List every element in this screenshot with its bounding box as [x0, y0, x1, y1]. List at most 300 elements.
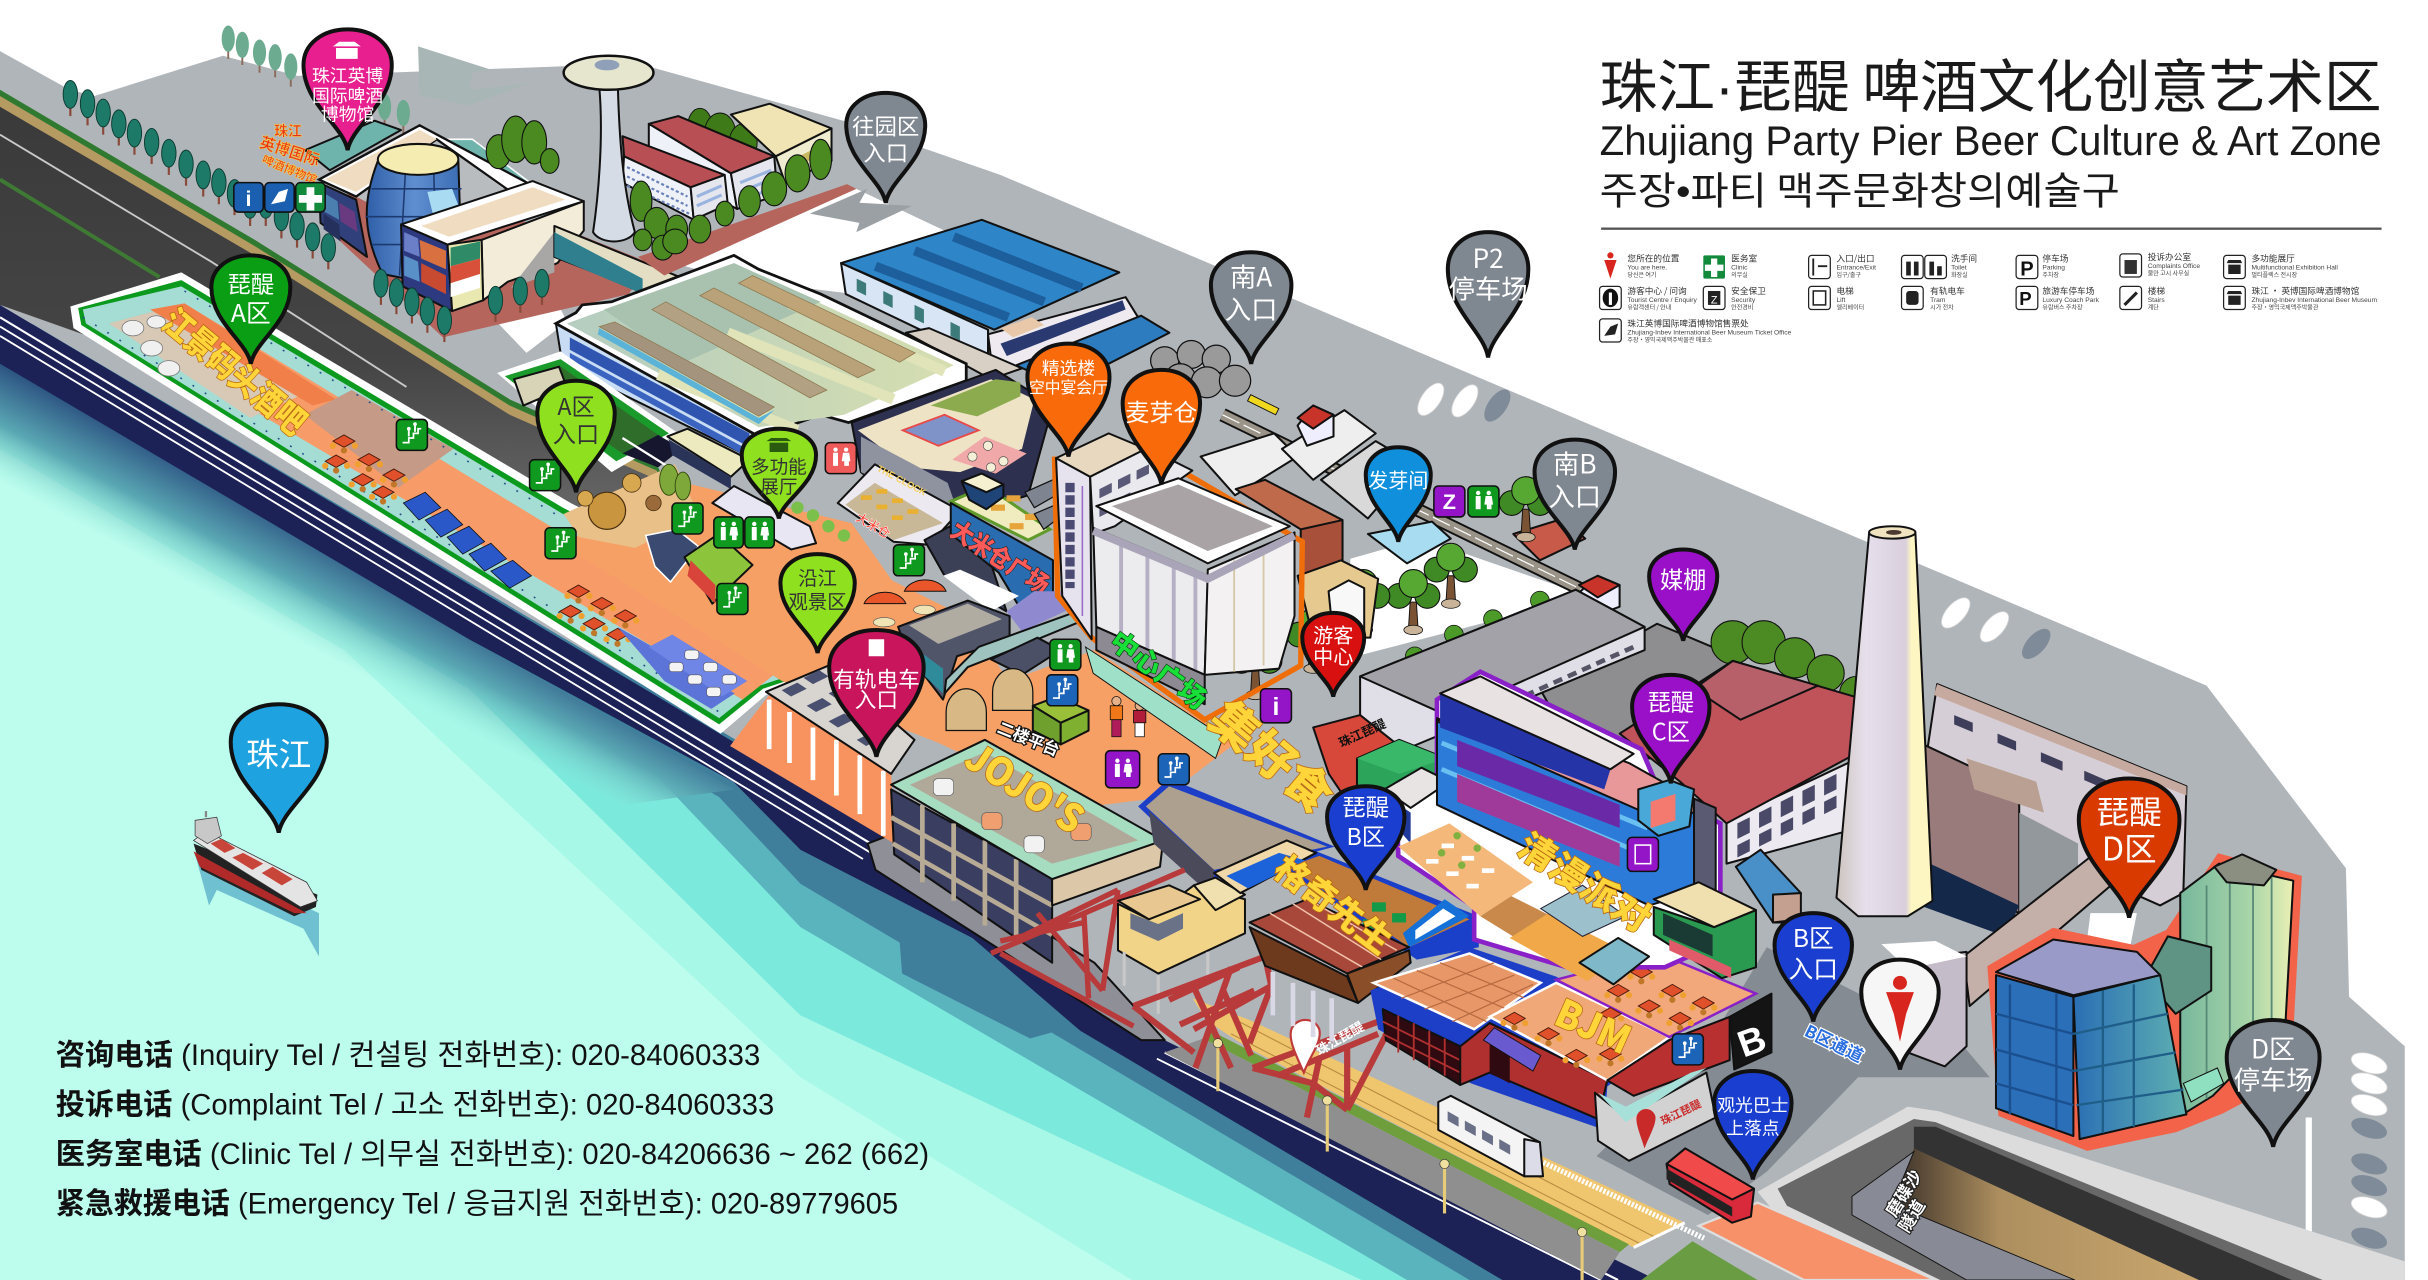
legend: tourist centre [1600, 285, 1698, 312]
museum sign [257, 123, 323, 187]
legend: parking: Parking [2042, 264, 2065, 271]
panel: grey warehouses [1360, 590, 1767, 758]
pin: malt silo: 麦芽仓 [1125, 393, 1197, 428]
salmon walkway [1699, 1203, 1936, 1280]
panel: telephone numbers [56, 1039, 929, 1220]
second floor label: 二楼平台 [994, 714, 1064, 761]
blue canopy [951, 503, 1053, 611]
pin: B zone [1327, 786, 1404, 890]
panel: blue warehouse [841, 220, 1169, 387]
glass rail [1085, 647, 1223, 758]
panel: legend [1600, 251, 2377, 344]
bus white [1438, 1096, 1543, 1176]
pin: tram entrance [829, 630, 924, 757]
terrace [1398, 823, 1533, 916]
museum front trees [374, 269, 549, 342]
legend: tram: Tram [1930, 297, 1946, 304]
gas tanks [1151, 341, 1251, 398]
complaint tel: 投诉电话 (Complaint Tel / 고소 전화번호): 020-84060333 [56, 1088, 774, 1121]
blue right face [2073, 975, 2186, 1139]
pin: multifunction hall: 多功能 [751, 453, 807, 480]
legend: beer museum: 주장·영믹국제맥주박물관 [2251, 303, 2319, 312]
tunnel label: 磨碟沙 [1878, 1164, 1927, 1221]
patio [952, 436, 1027, 474]
panel: white service roads [492, 189, 1587, 658]
silo scalloped shadow [1093, 531, 1295, 579]
legend: tram [1902, 285, 1965, 312]
pin: multifunction hall [742, 429, 816, 518]
pin: visitor center: 游客 [1313, 619, 1353, 648]
panel: beer hall block [838, 370, 1146, 761]
orange walk [1510, 913, 1626, 981]
conveyor [1963, 854, 2118, 1006]
white tent [712, 486, 816, 549]
small dark kiosk [898, 601, 1010, 700]
legend: ticket office: 珠江英博国际啤酒博物馆售票处 [1627, 318, 1749, 330]
striped roof [1250, 899, 1409, 974]
plant side volume [2019, 813, 2078, 913]
white seats [669, 650, 736, 696]
panel: Modiesha tunnel [1641, 1107, 2405, 1280]
party pier logo on crane [1291, 1016, 1367, 1073]
lamps [1218, 1045, 1582, 1280]
legend: tourist centre: 유람객센터 / 안내 [1627, 303, 1671, 312]
hall roof [556, 255, 966, 436]
pin: sky banquet hall [1027, 344, 1109, 456]
ship cabin [195, 817, 221, 844]
legend: coach park [2016, 285, 2100, 312]
red-roof small kiosk [1579, 576, 1620, 616]
party pier wall: 珠江琵醍 [1658, 1095, 1704, 1129]
pin: sightseeing bus stop [1714, 1071, 1792, 1179]
pin: P2 parking: P2 [1472, 237, 1504, 276]
panel: Mr. Geqi restaurant [1214, 840, 1479, 1042]
pin: South A entrance: 入口 [1225, 288, 1277, 327]
pin: Zhujiang Inbev museum: 珠江英博 [312, 62, 383, 88]
orange umbrellas [864, 580, 946, 627]
legend: security [1703, 285, 1766, 312]
legend: you are here: You are here. [1627, 264, 1667, 271]
black B block: B [1732, 1017, 1771, 1065]
museum corridor [554, 226, 680, 294]
hedge [791, 501, 850, 542]
icon: info purple [1260, 689, 1291, 723]
navy cube [962, 474, 1003, 509]
legend: clinic: 의무실 [1731, 270, 1748, 279]
panel: dock and orange pier [730, 666, 1165, 1040]
green lawn [931, 379, 1020, 416]
museum sign: 英博国际 [257, 133, 323, 170]
bridge seating [1007, 591, 1075, 631]
legend: stairs: 계단 [2148, 303, 2159, 312]
ship hatches [211, 839, 293, 885]
panel: ship [194, 811, 319, 957]
legend: you are here: 당신은 여기 [1627, 270, 1656, 279]
panel: garden and stairs [564, 429, 850, 604]
glass canopy [1541, 885, 1626, 936]
pin: sky banquet hall: 空中宴会厅 [1029, 375, 1108, 398]
tiled roof [1373, 953, 1541, 1029]
panel: visitor center logo wall: 珠江琵醍 [1335, 714, 1389, 751]
arrow: park road [810, 189, 912, 232]
legend: you are here [1604, 252, 1680, 279]
silo roof [1096, 478, 1290, 563]
right deck [1556, 953, 1756, 1037]
pin: park entrance [846, 93, 925, 203]
panel: blue glass tower D-zone [1990, 854, 2299, 1148]
rock garden [564, 464, 700, 548]
icon: stairs green [396, 419, 924, 614]
legend: ticket office [1600, 318, 1792, 344]
pin: D zone parking: 停车场 [2234, 1059, 2313, 1098]
hedge row [1405, 591, 1549, 666]
icon: visitor info, ticket, clinic: i [246, 186, 252, 211]
party pier logo on crane: 珠江琵醍 [1312, 1016, 1367, 1059]
panel: BJM bar [1370, 947, 1771, 1161]
legend: toilet: Toilet [1951, 264, 1967, 271]
factory roof [1620, 661, 1864, 823]
green shrubs [1711, 621, 1874, 710]
pin: malt silo [1123, 370, 1200, 484]
legend: coach park: Luxury Coach Park [2042, 297, 2100, 304]
panel: central orange plaza [562, 480, 1236, 808]
legend: coach park: P [2019, 288, 2032, 309]
office tower [1056, 433, 1192, 639]
panel: river road [0, 90, 735, 534]
pin: C zone: 琵醍 [1648, 683, 1694, 717]
legend: security: Security [1731, 297, 1756, 304]
museum left wing [319, 125, 533, 257]
legend: parking: 주차장 [2042, 270, 2060, 279]
pin: sightseeing bus stop: 上落点 [1726, 1115, 1780, 1141]
pin: Pearl River: 珠江 [246, 729, 311, 776]
stairs [646, 529, 698, 582]
legend: lift: 엘리베이터 [1836, 303, 1864, 312]
pin: tram entrance: 有轨电车 [833, 663, 920, 694]
orange outline [1055, 457, 1302, 720]
crane three [1253, 1020, 1387, 1117]
office cream block [731, 104, 832, 183]
panel: red brick factory and shrubs [1620, 621, 1874, 864]
pin: sightseeing bus stop: 观光巴士 [1717, 1091, 1788, 1117]
green deck [951, 486, 1050, 540]
pin: D zone: D区 [2102, 824, 2157, 871]
white sofas [122, 316, 180, 376]
pin: A zone: A区 [231, 294, 271, 330]
plant body [1920, 743, 2019, 913]
tunnel road [1758, 1107, 2405, 1280]
red sign: rice barn plaza: 大米仓广场 [944, 511, 1057, 602]
legend: entrance: Entrance/Exit [1836, 264, 1876, 271]
terrace outline [70, 272, 875, 734]
icon: visitor info, ticket, clinic [234, 183, 325, 212]
deck [1490, 983, 1669, 1080]
legend: beer museum [2224, 285, 2377, 312]
legend: security: Z [1711, 294, 1718, 306]
legend: lift: 电梯 [1836, 285, 1854, 297]
red bus [1667, 1148, 1754, 1223]
legend: parking [2016, 253, 2069, 281]
panel: covered walkway [906, 328, 1022, 379]
pin: riverside viewpoint: 沿江 [798, 563, 837, 591]
fence [1540, 1161, 1704, 1238]
pin: D zone parking [2227, 1020, 2320, 1147]
legend: complaints [2120, 251, 2200, 278]
museum front block [401, 181, 584, 311]
red front wall [1460, 1023, 1607, 1119]
pin: South B entrance [1535, 440, 1615, 550]
pin: C zone: C区 [1652, 713, 1690, 747]
legend: clinic [1703, 253, 1758, 279]
panel: waterfront road lower [1164, 998, 1685, 1280]
pin: South A entrance: 南A [1230, 255, 1272, 294]
panel: shuttle bus and road fence [1213, 1039, 1754, 1280]
icon: brick chimney [1836, 526, 1932, 916]
ship hull [194, 844, 317, 916]
panel: Qingman party building [1384, 672, 1756, 984]
crane one [991, 870, 1185, 1026]
title: Chinese: 珠江·琵醍 啤酒文化创意艺术区 [1600, 42, 2382, 124]
legend: coach park: 유람버스 주차장 [2042, 303, 2083, 312]
label: B-zone passage: B区通道 [1801, 1017, 1868, 1067]
icon: toilets [714, 443, 1499, 670]
pin: visitor center: 中心 [1313, 641, 1353, 670]
museum teal roof [305, 121, 401, 170]
pin: Pearl River [231, 704, 327, 833]
inquiry tel: 咨询电话 (Inquiry Tel / 컨설팅 전화번호): 020-84060333 [56, 1039, 760, 1072]
green kiosk [684, 534, 753, 604]
top roof [1440, 676, 1634, 789]
blue left face [1996, 975, 2073, 1136]
legend: toilet [1902, 253, 1977, 279]
garden trees [1229, 477, 1552, 700]
legend: tram: 시가 전차 [1930, 303, 1954, 312]
blue tents [403, 492, 532, 588]
title: Korean: 주장•파티 맥주문화창의예술구 [1600, 160, 2120, 216]
rear shrubs [688, 108, 757, 161]
pin: media shed: 媒棚 [1660, 561, 1706, 595]
pin: Zhujiang Inbev museum: 博物馆 [321, 101, 374, 127]
panel: long roof hall [556, 255, 966, 458]
warehouse roof [841, 220, 1119, 330]
pin: Zhujiang Inbev museum: 国际啤酒 [312, 82, 383, 108]
pin: D zone [2079, 779, 2179, 918]
beige annex [1298, 560, 1378, 638]
legend: parking: 停车场 [2042, 253, 2069, 265]
pin: A zone entrance: 入口 [553, 416, 599, 450]
arrow: north road [418, 46, 528, 105]
upper deck dark shell [852, 370, 1053, 526]
gray wall [861, 436, 960, 519]
museum rear skylight [437, 139, 528, 187]
shrubs [486, 116, 559, 173]
icon: lift purple [1106, 751, 1658, 871]
tables [1500, 966, 1717, 1068]
legend: parking: P [2020, 259, 2034, 281]
green cube [1033, 696, 1089, 744]
legend: entrance: 입구/출구 [1836, 270, 1861, 279]
panel: Jojo's building [891, 728, 1163, 963]
panel: A-zone entrance stair [497, 351, 681, 472]
brick building [1236, 480, 1343, 576]
party pier wall [1595, 1068, 1716, 1161]
legend: complaints: 投诉办公室 [2148, 251, 2191, 263]
office block front [622, 136, 728, 220]
legend: tourist centre: 游客中心 / 问询 [1627, 285, 1687, 297]
facade [891, 789, 1052, 963]
legend: clinic: 医务室 [1731, 253, 1758, 265]
blue deck [618, 627, 735, 709]
panel: blue truck [1736, 850, 1801, 922]
panel: darker forecourt [1596, 947, 1990, 1215]
orange halo [1990, 856, 2299, 1148]
panel: facility icons on map [396, 419, 1703, 1065]
elevated rail [1223, 415, 1595, 596]
low plant block [1902, 952, 1967, 1066]
offices brick path [638, 184, 856, 276]
stair box [1638, 780, 1694, 836]
silo left face [1093, 528, 1208, 675]
legend: you are here: 您所在的位置 [1627, 253, 1680, 265]
panel: Jiangjing pier A-zone terrace [70, 272, 875, 734]
right red wall [1607, 1017, 1730, 1096]
icon: stairs blue [1047, 675, 1703, 1065]
pin: A zone: 琵醍 [228, 266, 274, 300]
panel: quay wall and tram rails [0, 305, 1657, 1280]
black B block [1730, 994, 1771, 1070]
terrace railing lines [83, 291, 719, 712]
glowing sign: Jihaoshi food street: 集好食 [1197, 683, 1350, 826]
legend: beer museum: 珠江 · 英博国际啤酒博物馆 [2251, 285, 2360, 297]
pin: B zone entrance: 入口 [1789, 950, 1838, 986]
green verge [1641, 1241, 1758, 1280]
people [1110, 696, 1146, 737]
pin: Zhujiang Inbev museum [304, 29, 392, 150]
icon: security purple: Z [1443, 489, 1456, 514]
glass cone [365, 144, 468, 279]
tunnel label second line: 隧道 [1891, 1194, 1930, 1236]
small red-roof kiosk [1298, 406, 1334, 446]
pin: South A entrance [1211, 252, 1291, 364]
glowing sign: Jojo's: JOJO'S [956, 728, 1096, 845]
pin: C zone [1632, 675, 1710, 783]
pin: park entrance: 往园区 [852, 110, 919, 142]
icon: stairs glyphs green [403, 422, 918, 607]
awning [2183, 1068, 2224, 1102]
footbridge [945, 607, 1090, 693]
gray stacked boxes [1025, 480, 1056, 529]
pin: riverside viewpoint: 观景区 [789, 586, 847, 614]
legend: complaints: 불만 고시 사무실 [2148, 269, 2189, 278]
legend: ticket office: 주장·영믹국제맥주박물관 매표소 [1627, 335, 1713, 344]
legend: security: 安全保卫 [1731, 285, 1766, 297]
tree rows [63, 26, 410, 269]
pin: germination room: 发芽间 [1368, 465, 1428, 494]
icon: info purple: i [1272, 694, 1279, 721]
panel: central long roof [1138, 779, 1335, 898]
pin: riverside viewpoint [780, 554, 855, 653]
pin: B zone entrance [1775, 913, 1852, 1022]
purple halo [1397, 672, 1720, 967]
legend: security: 안전경비 [1731, 303, 1753, 312]
facade [1437, 718, 1706, 905]
clock terrace box [838, 464, 960, 545]
legend: exhibition hall [2224, 253, 2338, 279]
clock sign: THE CLOCK [875, 463, 928, 498]
left lattice wall [1383, 1009, 1460, 1085]
blue border [1370, 947, 1669, 1130]
panel: river water [0, 310, 1720, 1280]
green tower [2180, 854, 2293, 1116]
blue roof [1996, 939, 2160, 995]
legend: lift [1809, 285, 1864, 312]
icon: security purple [1434, 486, 1465, 517]
pin: you are here [1861, 960, 1939, 1070]
legend: beer museum: Zhujiang-Inbev International Beer Museum [2251, 297, 2377, 304]
pin: germination room [1366, 447, 1431, 542]
legend: tourist centre: Tourist Centre / Enquiry [1627, 297, 1698, 304]
silo base [1096, 627, 1205, 704]
legend: lift: Lift [1836, 297, 1846, 304]
glowing sign: BJM: BJM [1547, 983, 1641, 1066]
panel: campus tower and offices [486, 56, 856, 276]
pin: multifunction hall: 展厅 [760, 473, 797, 500]
pin: B zone entrance: B区 [1793, 919, 1834, 955]
legend: stairs: 楼梯 [2148, 285, 2165, 297]
pin: A zone entrance: A区 [557, 388, 595, 422]
factory wall [1727, 755, 1864, 864]
hall roof stripes [599, 276, 915, 416]
side columns [1694, 799, 1716, 913]
pin: sky banquet hall: 精选楼 [1042, 355, 1095, 381]
terrace floor [109, 303, 782, 700]
legend: coach park: 旅游车停车场 [2042, 285, 2095, 297]
legend: exhibition hall: Multifunctional Exhibition Hall [2251, 264, 2338, 271]
teal planter [1579, 938, 1649, 984]
museum court [356, 136, 503, 245]
legend: exhibition hall: 멀티플렉스 전시장 [2251, 270, 2298, 279]
pin: media shed [1649, 549, 1717, 641]
warehouse annex [988, 297, 1169, 387]
yellow house [1118, 878, 1245, 1014]
domes [946, 669, 1033, 731]
silo right face [1205, 532, 1295, 675]
pin: A zone entrance [537, 381, 615, 492]
stair block [991, 638, 1061, 675]
pin: P2 parking: 停车场 [1449, 268, 1528, 307]
green sign: central plaza: 中心广场 [1103, 620, 1216, 717]
white roof [943, 570, 1019, 611]
green low block [2145, 936, 2211, 1014]
clinic tel: 医务室电话 (Clinic Tel / 의무실 전화번호): 020-84206636 ~ 262 (662) [56, 1138, 929, 1171]
deck [1437, 704, 1706, 823]
7-11 shop [1654, 882, 1756, 978]
office shrubs [630, 139, 832, 260]
pavilion [1214, 840, 1316, 893]
glowing sign: Mr Geqi: 格奇先生 [1266, 842, 1404, 963]
roof deck [891, 740, 1163, 879]
dark hall [924, 520, 1007, 611]
deck sofas [933, 779, 1091, 853]
observation tower [564, 56, 653, 241]
brown walk [1480, 896, 1595, 966]
table groups [322, 435, 639, 647]
panel: brown power plant [1881, 684, 2186, 1066]
emergency tel: 紧急救援电话 (Emergency Tel / 응급지원 전화번호): 020-89779605 [56, 1187, 898, 1220]
pin: South B entrance: 入口 [1548, 475, 1601, 514]
legend: stairs [2120, 285, 2165, 312]
pin: B zone: B区 [1347, 818, 1385, 852]
